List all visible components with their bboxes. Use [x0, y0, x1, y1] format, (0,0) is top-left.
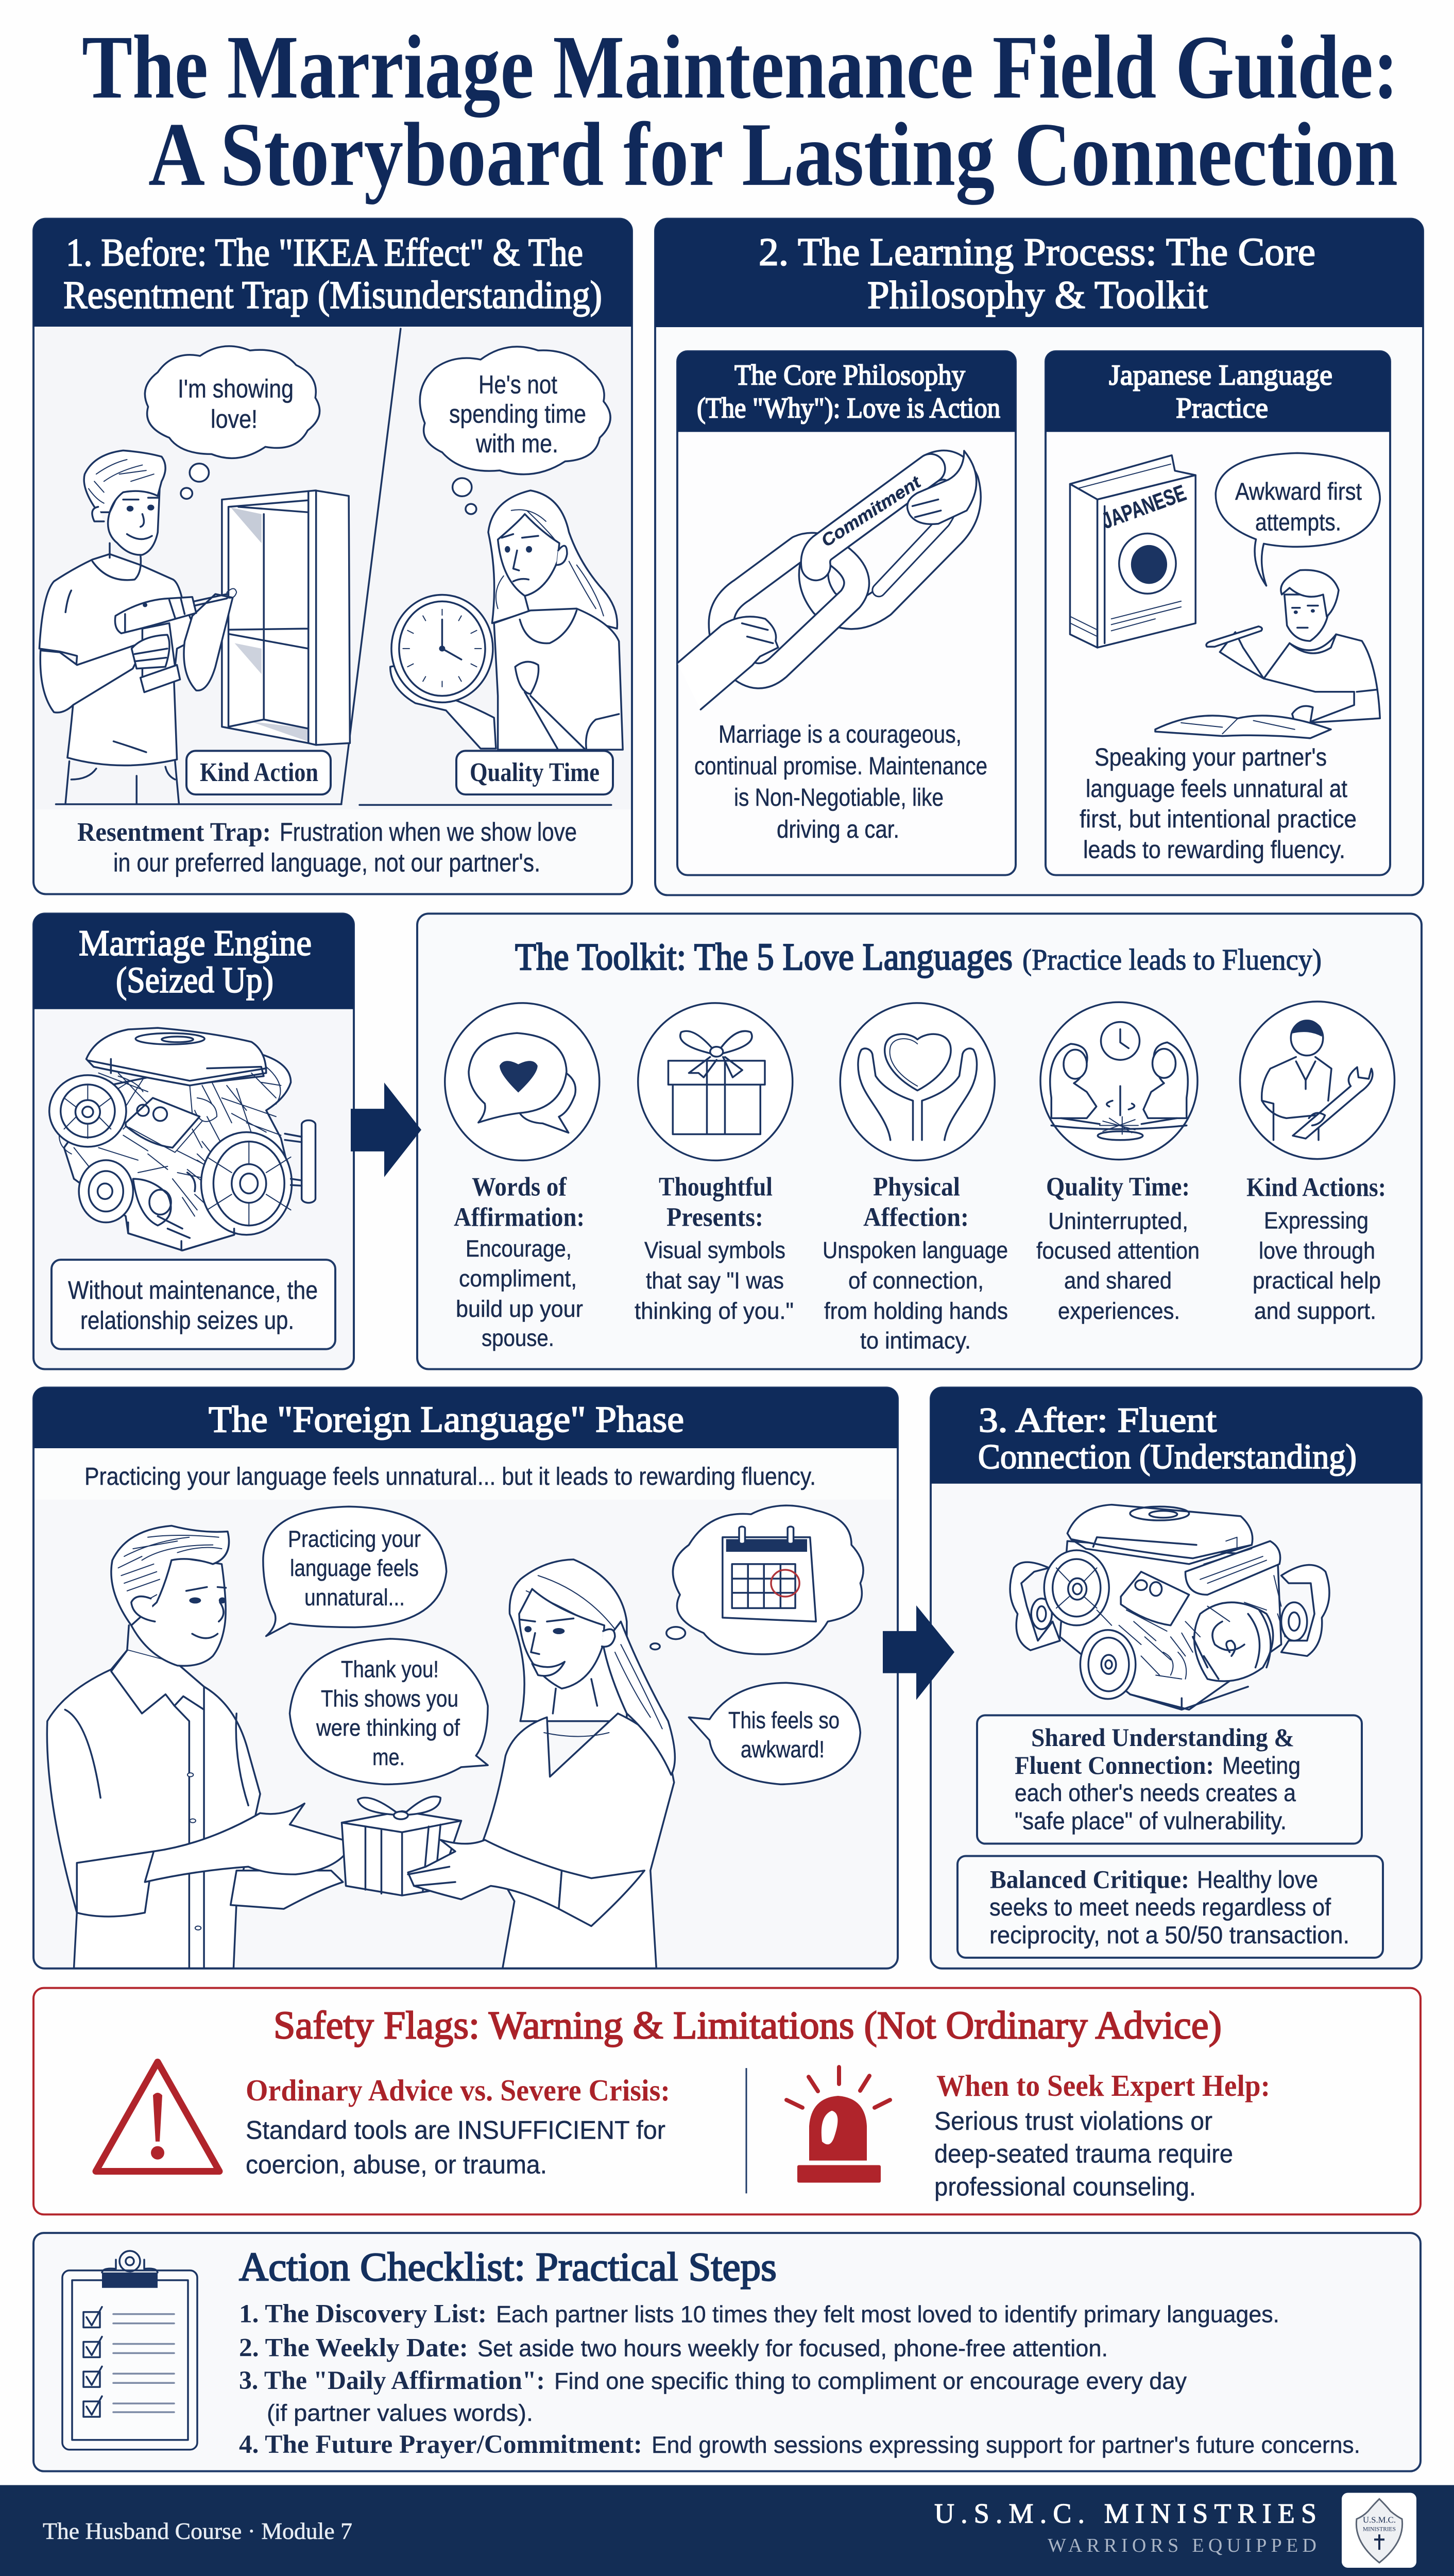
speech bubble: practicing your language: unnatural... [304, 1584, 405, 1611]
illustration: chain links with commitment [677, 451, 977, 709]
callout: shared understanding: "safe place" of vulnerability. [1015, 1808, 1287, 1835]
text: japanese practice: language feels unnatural at [1086, 775, 1347, 803]
step: future prayer: 4. The Future Prayer/Commitment: [239, 2430, 642, 2459]
label: commitment: Commitment [818, 472, 925, 551]
text: kind actions: practical help [1253, 1267, 1381, 1294]
callout: balanced critique: Healthy love [1197, 1866, 1318, 1893]
heading: foreign language phase [33, 1387, 898, 1448]
text: kind actions: and support. [1254, 1297, 1376, 1324]
text: quality time: and shared [1064, 1267, 1172, 1294]
text: thoughtful presents [635, 1173, 794, 1324]
callout: balanced critique: Balanced Critique: [990, 1865, 1189, 1893]
heading: after: Connection (Understanding) [978, 1437, 1357, 1476]
label: kind action: Kind Action [200, 758, 318, 787]
heading: after [931, 1387, 1422, 1484]
heading: toolkit [515, 936, 1322, 978]
panel: learning process [655, 219, 1423, 895]
thought bubble: calendar [651, 1505, 863, 1654]
panel: action checklist [33, 2233, 1421, 2471]
item: thoughtful presents [635, 1003, 794, 1324]
callout: shared understanding: each other's needs creates a [1015, 1780, 1296, 1806]
text: resentment trap: Frustration when we show love [280, 818, 577, 846]
heading: toolkit: (Practice leads to Fluency) [1022, 943, 1322, 976]
text: thoughtful presents: Thoughtful [659, 1173, 773, 1202]
text: thoughtful presents: Presents: [666, 1202, 763, 1232]
label: quality time [456, 751, 613, 794]
speech bubble: practicing your language: language feels [290, 1554, 419, 1581]
text: core philosophy: is Non-Negotiable, like [734, 784, 944, 811]
speech bubble: this feels so awkward: awkward! [741, 1736, 825, 1762]
heading: learning process [655, 219, 1423, 327]
icon: hands holding heart [840, 1003, 995, 1160]
text: words of affirmation: Affirmation: [454, 1202, 585, 1232]
icon: red siren [786, 2067, 890, 2182]
text: physical affection [823, 1173, 1008, 1354]
illustration: student practicing [1155, 570, 1380, 738]
text: kind actions: Expressing [1264, 1207, 1369, 1233]
illustration: seized engine [49, 1028, 315, 1250]
text: foreign language subtitle: Practicing your language feels unnatural... but it leads to rewarding fluency. [84, 1463, 816, 1490]
text: core philosophy: driving a car. [777, 816, 899, 843]
item: kind actions [1240, 1002, 1395, 1324]
text: resentment trap [77, 818, 577, 877]
label: japanese: JAPANESE [1099, 480, 1189, 534]
speech bubble: this feels so awkward: This feels so [728, 1706, 840, 1733]
sub-heading: core philosophy: (The "Why"): Love is Action [697, 392, 1000, 424]
thought bubble: not spending time: spending time [449, 399, 586, 428]
heading: before: 1. Before: The "IKEA Effect" & The [66, 230, 583, 274]
illustration: man giving gift [47, 1526, 346, 1968]
text: physical affection: Unspoken language [823, 1236, 1008, 1263]
text: thoughtful presents: thinking of you." [635, 1297, 794, 1324]
callout: without maintenance: relationship seizes up. [80, 1307, 294, 1335]
step: future prayer [239, 2430, 1360, 2459]
text: core philosophy: continual promise. Maintenance [694, 753, 987, 780]
footer: seal [1342, 2493, 1416, 2568]
speech bubble: thank you: This shows you [321, 1685, 458, 1711]
text: physical affection: from holding hands [824, 1297, 1008, 1324]
heading: action checklist: Action Checklist: Practical Steps [239, 2245, 777, 2290]
footer: course label: The Husband Course · Module 7 [43, 2518, 352, 2544]
step: discovery list: 1. The Discovery List: [239, 2300, 487, 2329]
illustration: man with drill and bookshelf [39, 329, 623, 805]
step: discovery list [239, 2300, 1279, 2329]
text: kind actions: love through [1259, 1237, 1375, 1264]
arrow: engine to toolkit [351, 1082, 421, 1177]
footer: ministry name: U.S.M.C. MINISTRIES [934, 2498, 1316, 2529]
text: japanese practice: first, but intentional practice [1080, 806, 1357, 833]
arrow: foreign language to after [883, 1605, 954, 1700]
text: core philosophy [694, 721, 987, 843]
callout: shared understanding: Meeting [1222, 1752, 1301, 1779]
callout: without maintenance: Without maintenance, the [68, 1277, 318, 1304]
thought bubble: not spending time [420, 347, 610, 514]
text: quality time: Quality Time: [1046, 1173, 1190, 1202]
speech bubble: awkward first attempts: Awkward first [1235, 478, 1362, 505]
text: when to seek expert help: When to Seek Expert Help: [936, 2069, 1270, 2103]
item: quality time [1036, 1002, 1200, 1324]
sub-heading: core philosophy: The Core Philosophy [734, 360, 965, 392]
step: daily affirmation: 3. The "Daily Affirmation": [239, 2366, 545, 2395]
thought bubble: showing love: I'm showing [178, 375, 294, 403]
text: japanese practice: leads to rewarding fluency. [1083, 837, 1345, 864]
icon: japanese book [1070, 455, 1195, 648]
heading: foreign language phase: The "Foreign Language" Phase [209, 1399, 684, 1440]
text: resentment trap: in our preferred language, not our partner's. [113, 849, 540, 877]
text: japanese practice [1080, 744, 1357, 864]
step: weekly date: Set aside two hours weekly for focused, phone-free attention. [477, 2334, 1108, 2361]
thought bubble: showing love [145, 346, 320, 499]
text: words of affirmation: build up your [456, 1295, 583, 1322]
icon: speech bubbles with heart [445, 1003, 600, 1160]
icon: gift box [638, 1003, 793, 1160]
speech bubble: thank you: Thank you! [341, 1656, 439, 1683]
sub-heading: core philosophy [677, 351, 1016, 432]
text: ordinary advice vs severe crisis: Standard tools are INSUFFICIENT for [246, 2116, 665, 2145]
step: daily affirmation: (if partner values words). [267, 2399, 533, 2426]
speech bubble: awkward first attempts: attempts. [1255, 509, 1341, 536]
text: thoughtful presents: Visual symbols [644, 1236, 785, 1263]
heading: learning process: 2. The Learning Process: The Core [759, 230, 1315, 274]
footer: ministry name: WARRIORS EQUIPPED [1048, 2535, 1316, 2556]
text: kind actions [1246, 1173, 1386, 1324]
heading: safety flags: Safety Flags: Warning & Limitations (Not Ordinary Advice) [273, 2004, 1222, 2047]
icon: clipboard [62, 2251, 197, 2450]
label: quality time: Quality Time [470, 758, 600, 787]
heading: marriage engine: (Seized Up) [116, 960, 273, 1001]
text: resentment trap: Resentment Trap: [77, 818, 271, 847]
icon: man with wrench [1240, 1002, 1395, 1159]
icon: warning triangle [96, 2062, 219, 2172]
callout: shared understanding: Shared Understanding & [1031, 1723, 1294, 1752]
text: thoughtful presents: that say "I was [646, 1267, 784, 1294]
speech bubble: thank you: me. [372, 1743, 405, 1770]
footer: seal: MINISTRIES [1363, 2525, 1396, 2532]
sub-panel: japanese practice [1046, 351, 1390, 875]
heading: before [33, 219, 632, 327]
text: words of affirmation: compliment, [459, 1265, 577, 1292]
speech bubble: thank you [290, 1639, 488, 1784]
speech bubble: practicing your language: Practicing your [288, 1525, 421, 1552]
heading: toolkit: The Toolkit: The 5 Love Languages [515, 936, 1013, 978]
speech bubble: thank you: were thinking of [316, 1714, 460, 1741]
text: japanese practice: Speaking your partner's [1094, 744, 1327, 771]
text: quality time: Uninterrupted, [1048, 1207, 1188, 1234]
heading: marriage engine: Marriage Engine [79, 923, 312, 963]
title [82, 18, 1398, 205]
text: quality time: focused attention [1036, 1237, 1200, 1264]
heading: before: Resentment Trap (Misunderstanding) [63, 273, 602, 317]
thought bubble: not spending time: with me. [475, 429, 558, 458]
speech bubble: awkward first attempts [1216, 453, 1380, 586]
thought bubble: not spending time: He's not [478, 370, 557, 399]
text: physical affection: to intimacy. [860, 1327, 971, 1354]
footer [0, 2485, 1454, 2576]
speech bubble: practicing your language [263, 1506, 447, 1636]
item: words of affirmation [445, 1003, 600, 1351]
panel: marriage engine seized [33, 913, 354, 1369]
footer: ministry name [934, 2498, 1316, 2556]
panel: toolkit five love languages [417, 913, 1422, 1369]
text: when to seek expert help: deep-seated trauma require [934, 2140, 1233, 2168]
text: words of affirmation: Encourage, [466, 1235, 572, 1262]
heading: after: 3. After: Fluent [979, 1401, 1217, 1439]
text: kind actions: Kind Actions: [1246, 1173, 1386, 1202]
icon: couple at table with clock [1040, 1002, 1198, 1160]
panel: foreign language phase [33, 1387, 898, 1969]
sub-heading: japanese practice: Practice [1176, 392, 1268, 424]
callout: balanced critique [957, 1856, 1383, 1958]
callout: without maintenance [52, 1260, 335, 1349]
illustration: woman receiving gift [342, 1560, 675, 1968]
text: quality time [1036, 1173, 1200, 1324]
text: words of affirmation [454, 1173, 585, 1351]
callout: shared understanding: Fluent Connection: [1015, 1751, 1214, 1780]
divider [746, 2068, 747, 2193]
text: quality time: experiences. [1058, 1297, 1180, 1324]
label: kind action [186, 751, 331, 794]
heading: learning process: Philosophy & Toolkit [867, 273, 1208, 317]
callout: balanced critique: reciprocity, not a 50/50 transaction. [989, 1922, 1349, 1948]
sub-panel: core philosophy [677, 351, 1016, 875]
text: core philosophy: Marriage is a courageous, [719, 721, 962, 748]
text: when to seek expert help: professional counseling. [934, 2172, 1196, 2201]
text: words of affirmation: spouse. [482, 1325, 554, 1351]
panel: before [33, 219, 632, 894]
speech bubble: this feels so awkward [689, 1683, 860, 1784]
panel: safety flags [33, 1988, 1421, 2214]
sub-heading: japanese practice [1046, 351, 1390, 432]
text: when to seek expert help [934, 2069, 1270, 2201]
panel: after fluent connection [931, 1387, 1422, 1969]
footer: seal: U.S.M.C. [1363, 2515, 1396, 2524]
text: physical affection: Affection: [863, 1202, 969, 1232]
step: weekly date [239, 2333, 1108, 2362]
step: daily affirmation: Find one specific thing to compliment or encourage every day [554, 2367, 1187, 2394]
step: weekly date: 2. The Weekly Date: [239, 2333, 468, 2362]
callout: balanced critique: seeks to meet needs regardless of [989, 1894, 1331, 1921]
step: daily affirmation [239, 2366, 1187, 2426]
text: physical affection: of connection, [848, 1267, 984, 1294]
illustration: running engine [1010, 1505, 1329, 1709]
text: ordinary advice vs severe crisis [246, 2073, 670, 2179]
step: discovery list: Each partner lists 10 times they felt most loved to identify primary languages. [496, 2301, 1279, 2328]
step: future prayer: End growth sessions expressing support for partner's future concerns. [652, 2431, 1360, 2458]
text: physical affection: Physical [873, 1173, 960, 1202]
text: when to seek expert help: Serious trust violations or [934, 2107, 1212, 2136]
sub-heading: japanese practice: Japanese Language [1109, 360, 1332, 392]
text: ordinary advice vs severe crisis: coercion, abuse, or trauma. [246, 2150, 547, 2179]
callout: shared understanding [977, 1715, 1362, 1844]
thought bubble: showing love: love! [211, 404, 258, 433]
item: physical affection [823, 1003, 1008, 1354]
text: ordinary advice vs severe crisis: Ordinary Advice vs. Severe Crisis: [246, 2073, 670, 2107]
text: words of affirmation: Words of [472, 1173, 567, 1202]
heading: marriage engine [33, 913, 354, 1009]
